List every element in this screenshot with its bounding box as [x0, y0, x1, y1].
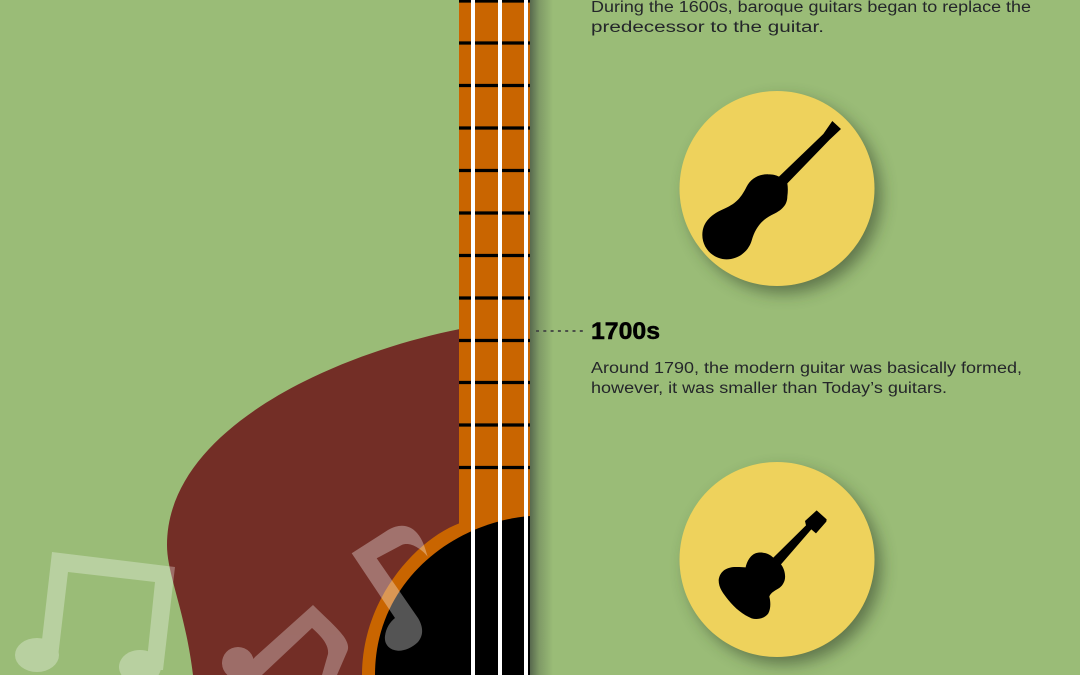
text block: 1700s: however, it was smaller than Today’s guitars.: [591, 380, 947, 397]
guitar strings: [471, 0, 528, 675]
music note: beamed, left: [15, 552, 175, 675]
sound hole with orange ring: [362, 500, 530, 675]
icon: modern guitar: [719, 510, 827, 619]
dotted connector: [536, 330, 585, 332]
music note: centre bottom: [222, 605, 348, 675]
music note: over sound hole: [352, 526, 428, 651]
heading: 1700s: 1700s: [591, 318, 660, 345]
badge: baroque guitar: [680, 91, 881, 293]
guitar body: [167, 329, 470, 675]
text block: 1600s: [591, 0, 1031, 36]
text block: 1600s: predecessor to the guitar.: [591, 19, 824, 36]
neck shadow: [530, 0, 553, 675]
black sound hole: [375, 516, 530, 675]
badge: modern guitar: [680, 462, 881, 664]
guitar neck and frets: [459, 0, 530, 530]
orange ring: [362, 500, 530, 675]
icon: baroque guitar: [702, 121, 841, 259]
text block: 1700s: Around 1790, the modern guitar was basically formed,: [591, 360, 1022, 377]
text block: 1700s: [591, 318, 1022, 397]
